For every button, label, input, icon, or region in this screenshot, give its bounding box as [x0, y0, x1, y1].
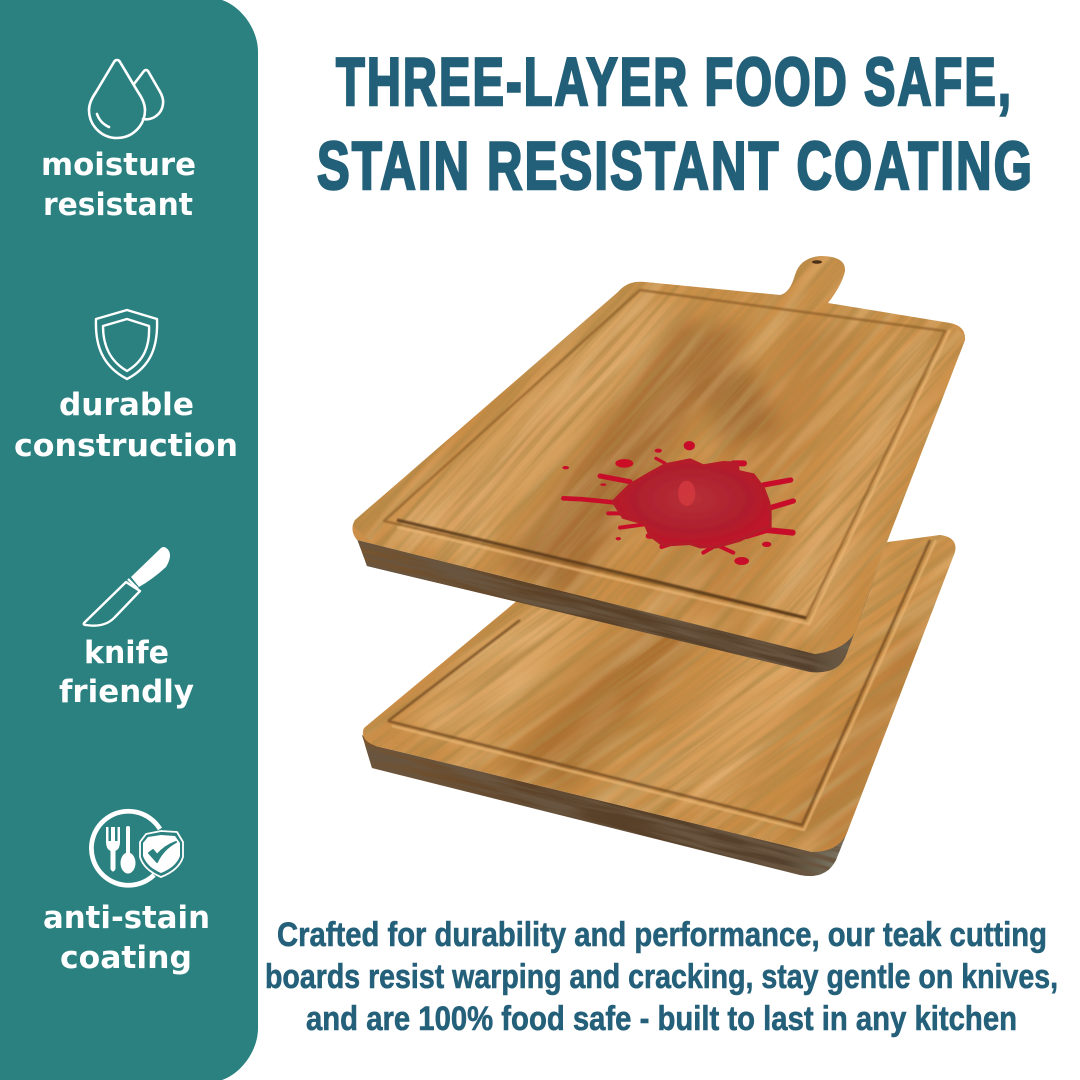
icon: shield [96, 310, 157, 379]
title [317, 44, 1034, 204]
board top surface [362, 535, 956, 852]
description text [265, 916, 1058, 1038]
label: anti-stain coating: anti-stain [43, 900, 210, 936]
label: knife friendly [59, 635, 194, 710]
label: moisture resistant: resistant [43, 187, 193, 223]
label: anti-stain coating: coating [60, 940, 192, 976]
upper cutting board [352, 256, 966, 672]
label: knife friendly: knife [84, 635, 169, 671]
icon: plate with cutlery and shield [91, 811, 183, 885]
panel: features sidebar [0, 0, 258, 1080]
icon: knife [84, 547, 170, 626]
juice groove [384, 290, 945, 618]
feature: anti-stain coating [43, 811, 210, 976]
red liquid splatter [562, 441, 793, 565]
label: durable construction: durable [59, 387, 194, 423]
lower cutting board [362, 535, 956, 876]
label: moisture resistant [41, 147, 196, 223]
feature: knife friendly [59, 547, 194, 710]
label: durable construction [14, 387, 238, 464]
feature: moisture resistant [41, 60, 196, 223]
label: durable construction: construction [14, 428, 238, 464]
label: moisture resistant: moisture [41, 147, 196, 183]
feature: durable construction [14, 310, 238, 464]
label: anti-stain coating [43, 900, 210, 976]
icon: water drops [89, 60, 163, 138]
board top surface [352, 256, 966, 654]
board side edge [362, 735, 848, 876]
board side edge [356, 540, 888, 672]
label: knife friendly: friendly [59, 674, 194, 710]
